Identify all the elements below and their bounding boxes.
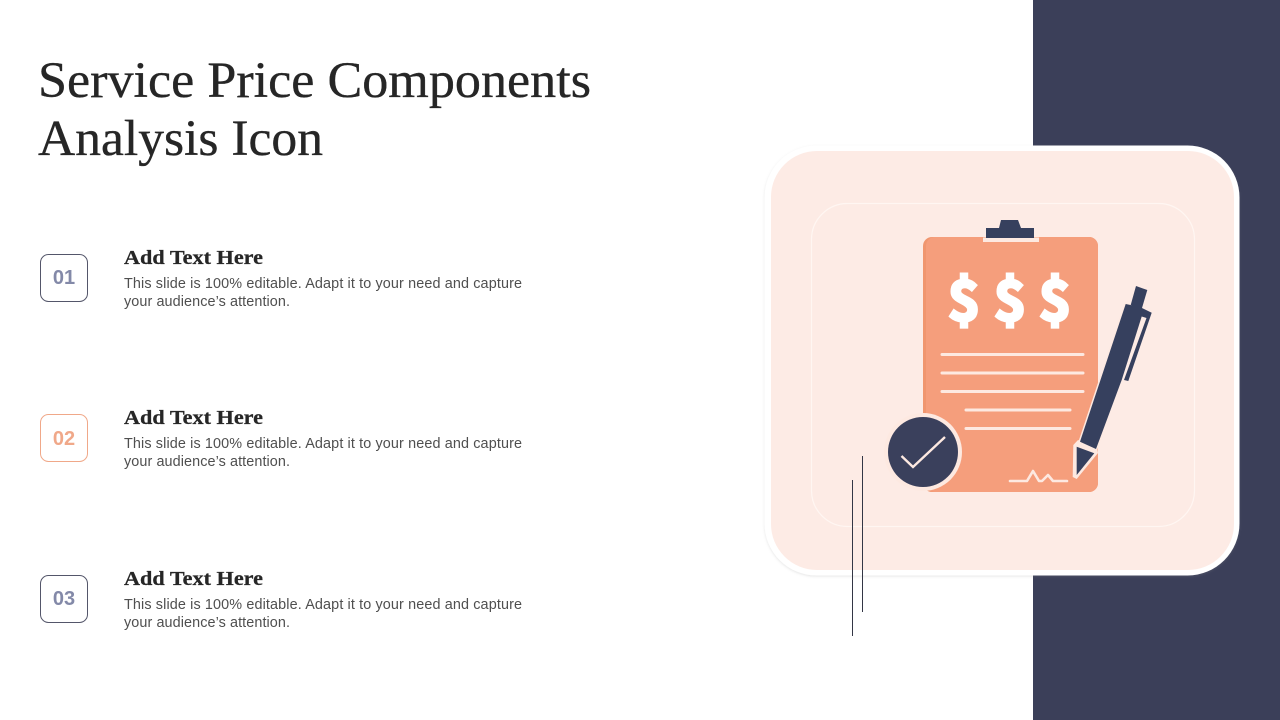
title: Analysis Icon xyxy=(38,111,323,167)
heading 03: Add Text Here xyxy=(124,568,263,590)
body text 03: This slide is 100% editable. Adapt it to your need and capture xyxy=(124,597,522,613)
body text 03 xyxy=(124,597,522,631)
body text 02: your audience’s attention. xyxy=(124,454,290,470)
title xyxy=(38,53,591,167)
heading 01: Add Text Here xyxy=(124,247,263,269)
dark side panel xyxy=(1033,0,1280,720)
item 01 xyxy=(40,247,522,310)
dollar signs xyxy=(948,256,1071,336)
dollar signs: $ xyxy=(1039,256,1071,336)
body text 01 xyxy=(124,276,522,310)
number badge 02 xyxy=(40,414,88,462)
body text 03: your audience’s attention. xyxy=(124,615,290,631)
clipboard board xyxy=(923,237,1098,492)
number badge 03: 03 xyxy=(53,588,75,610)
icon card xyxy=(764,146,1240,576)
title: Service Price Components xyxy=(38,53,591,109)
dollar signs: $ xyxy=(948,256,980,336)
decorative vertical lines xyxy=(852,456,862,636)
icon: pen xyxy=(1073,286,1152,479)
document lines xyxy=(942,354,1083,428)
item 03 xyxy=(40,568,522,631)
body text 01: This slide is 100% editable. Adapt it to your need and capture xyxy=(124,276,522,292)
signature xyxy=(1010,471,1067,481)
number badge 01 xyxy=(40,254,88,302)
dollar signs: $ xyxy=(994,256,1026,336)
body text 02 xyxy=(124,436,522,470)
heading 02: Add Text Here xyxy=(124,407,263,429)
number badge 01: 01 xyxy=(53,267,75,289)
number badge 02: 02 xyxy=(53,428,75,450)
body text 02: This slide is 100% editable. Adapt it to your need and capture xyxy=(124,436,522,452)
item 02 xyxy=(40,407,522,470)
icon: clipboard with price list xyxy=(884,220,1152,492)
body text 01: your audience’s attention. xyxy=(124,294,290,310)
number badge 03 xyxy=(40,576,88,622)
clipboard clip xyxy=(983,220,1039,242)
check badge xyxy=(884,413,962,491)
